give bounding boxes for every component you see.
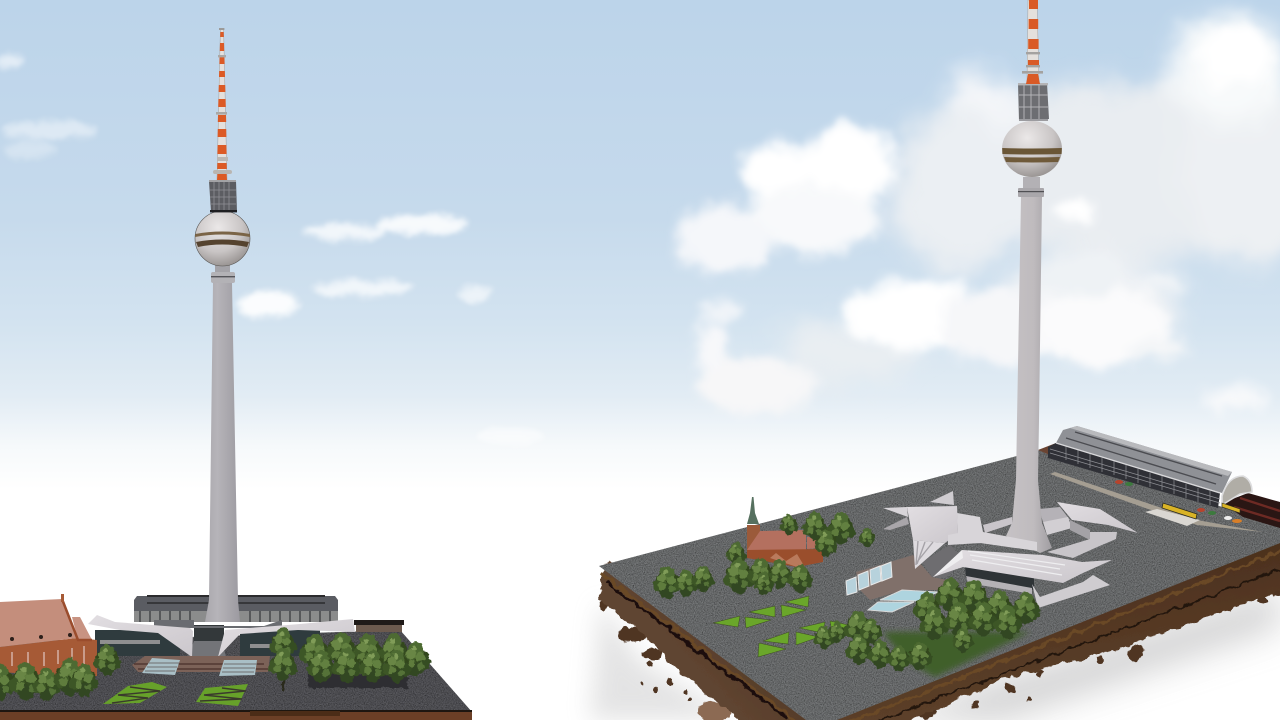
tower antenna bbox=[1022, 0, 1043, 84]
lawn panels bbox=[103, 682, 248, 706]
trees left group by church bbox=[0, 645, 121, 701]
tower sphere bbox=[1002, 121, 1062, 177]
large tree grove bbox=[913, 578, 1040, 653]
modern wings bbox=[88, 615, 355, 657]
tower sphere bbox=[195, 211, 250, 266]
south tree clusters bbox=[814, 610, 933, 672]
station road bbox=[1050, 472, 1263, 532]
left diorama bbox=[0, 28, 472, 720]
tower head box bbox=[1018, 83, 1049, 121]
green triangles bbox=[713, 596, 853, 657]
trees behind church bbox=[780, 512, 875, 557]
water pools bbox=[868, 590, 938, 612]
station hall bbox=[1038, 426, 1252, 508]
front wing roof bbox=[933, 550, 1112, 583]
gravel top surface bbox=[599, 450, 1280, 720]
lawn bbox=[883, 632, 1030, 677]
glass panes bbox=[846, 562, 892, 595]
church right bbox=[747, 497, 823, 567]
soil right face bbox=[830, 532, 1280, 720]
left soil strip bbox=[0, 710, 472, 720]
rail platform right bbox=[354, 620, 404, 632]
tower left bbox=[195, 28, 250, 622]
rail tracks bbox=[1222, 493, 1280, 528]
trams and cars bbox=[1115, 480, 1242, 523]
tower antenna bbox=[213, 28, 232, 180]
soil left face bbox=[598, 560, 814, 720]
tree cluster by church bbox=[723, 542, 813, 595]
clouds: left sky bbox=[0, 54, 544, 445]
tower shaft bbox=[1006, 197, 1052, 553]
clouds: right bright cumulus bbox=[674, 25, 1273, 413]
tower shaft bbox=[205, 283, 240, 622]
crumbling dirt bbox=[599, 588, 1280, 719]
dirt lump near corner bbox=[698, 701, 730, 720]
west star roof bbox=[883, 491, 958, 569]
back wing and connector bbox=[983, 502, 1138, 558]
church left bbox=[0, 594, 97, 676]
soft ground shadow bbox=[590, 590, 1280, 720]
tall tree bbox=[269, 628, 297, 690]
left ground surface bbox=[0, 630, 472, 712]
trees right cluster bbox=[299, 632, 431, 688]
plaza and reflecting pools bbox=[132, 656, 270, 676]
tower neck and collar bbox=[1018, 177, 1044, 197]
right tower bbox=[983, 0, 1138, 558]
center band roof bbox=[948, 513, 1037, 551]
tree cluster west bbox=[653, 565, 715, 599]
building underside and glass bbox=[922, 545, 1110, 608]
tower plaza bbox=[856, 555, 958, 600]
tower head box bbox=[209, 180, 237, 212]
station building behind tower bbox=[134, 595, 338, 622]
tower neck and collar bbox=[211, 262, 235, 283]
clouds: right soft backdrop bbox=[778, 18, 1280, 385]
right diorama bbox=[590, 0, 1280, 720]
modern roof complex bbox=[883, 491, 1112, 608]
